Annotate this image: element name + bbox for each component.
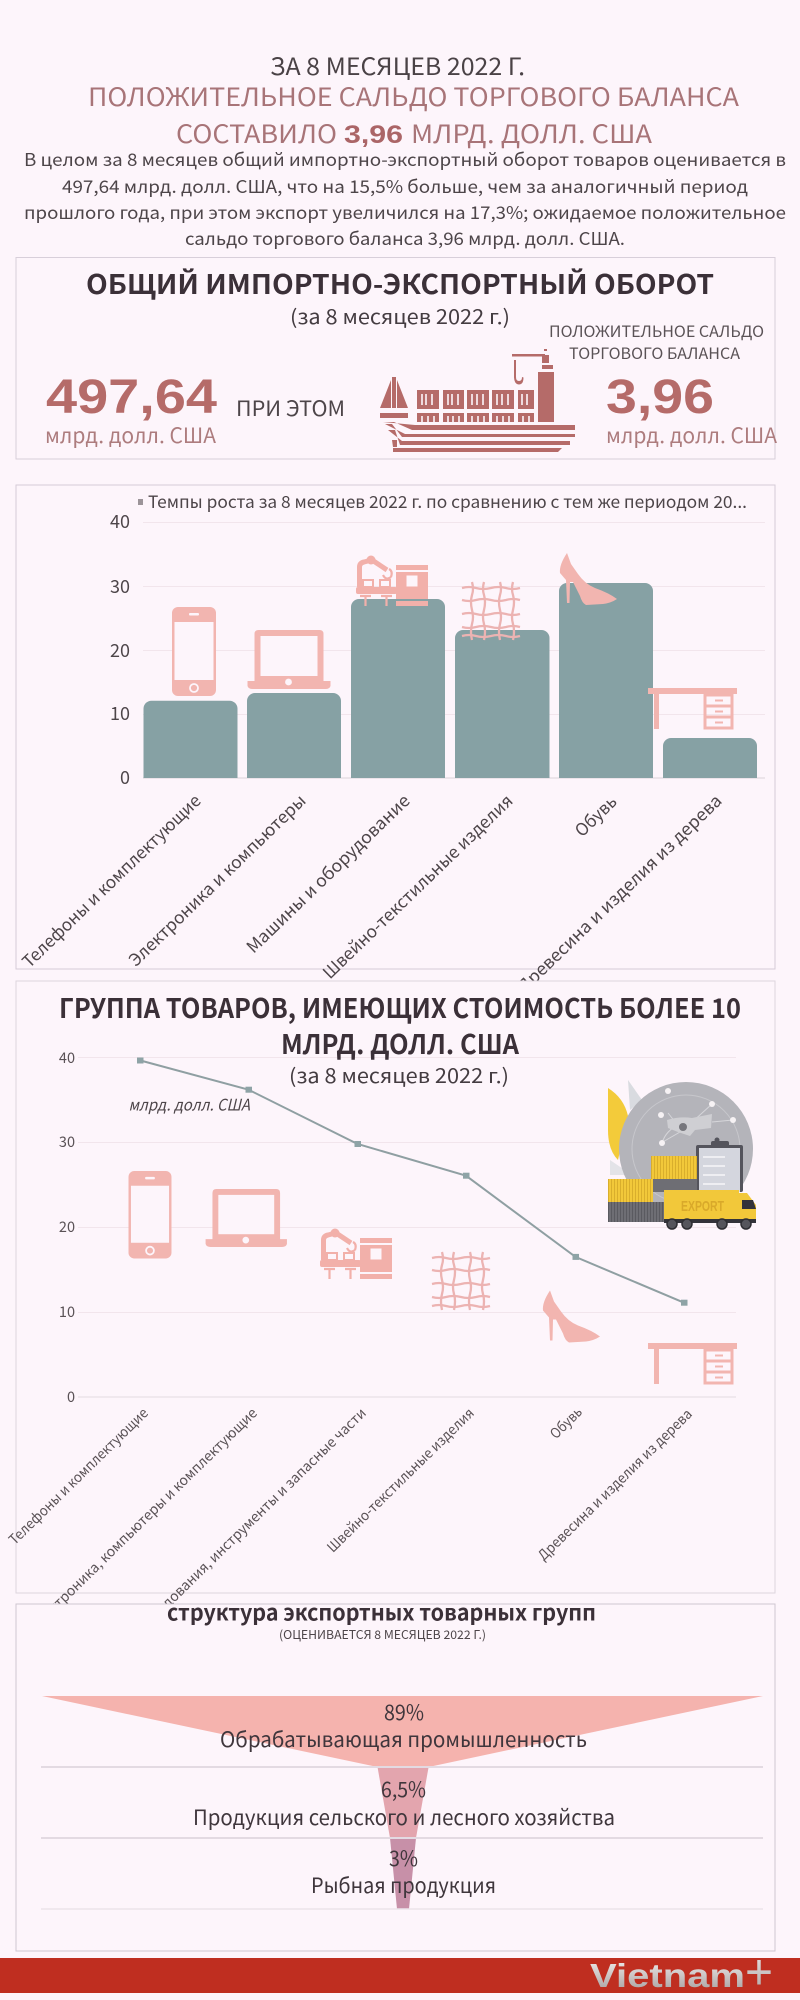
title line: period: ЗА 8 МЕСЯЦЕВ 2022 Г. bbox=[270, 47, 525, 82]
bar: textiles bbox=[455, 630, 550, 778]
heading: ОБЩИЙ ИМПОРТНО-ЭКСПОРТНЫЙ ОБОРОТ bbox=[86, 263, 714, 302]
icon: fabric bbox=[462, 582, 520, 640]
x axis labels: Обувь bbox=[545, 1402, 587, 1443]
x axis labels: Машины и оборудование bbox=[240, 788, 414, 958]
y axis: 40 bbox=[110, 508, 130, 534]
panel: goods over 10 billion line chart bbox=[4, 981, 775, 1687]
bars bbox=[144, 583, 757, 778]
x axis labels: Древесина и изделия из дерева bbox=[533, 1404, 696, 1565]
line series bbox=[137, 1058, 688, 1306]
y axis bbox=[110, 508, 130, 790]
y axis: 10 bbox=[110, 700, 130, 726]
figure: turnover bbox=[45, 371, 217, 450]
logo: Vietnam+ bbox=[590, 1944, 773, 2000]
icon: high heel bbox=[543, 1290, 600, 1342]
panel: total turnover bbox=[16, 258, 777, 459]
y axis: 10 bbox=[59, 1301, 75, 1322]
funnel tier: fishery bbox=[390, 1838, 416, 1909]
logo: Vietnam+: Vietnam bbox=[590, 1957, 745, 1994]
icon: desk bbox=[648, 688, 737, 729]
x axis labels: Машины, оборудования, инструменты и запасные части bbox=[81, 1403, 370, 1687]
icon: laptop bbox=[206, 1189, 287, 1247]
x axis labels: Электроника, компьютеры и комплектующие bbox=[26, 1403, 262, 1634]
x axis labels: Швейно-текстильные изделия bbox=[322, 1403, 478, 1557]
intro paragraph: В целом за 8 месяцев общий импортно-экспортный оборот товаров оценивается в bbox=[24, 147, 786, 172]
title line: amount bbox=[176, 115, 653, 151]
funnel labels: 3% bbox=[389, 1843, 418, 1873]
icon: high heel bbox=[560, 553, 617, 605]
panel: growth rate bar chart bbox=[15, 485, 775, 997]
figure: turnover: 497,64 bbox=[46, 371, 217, 424]
x axis labels: Телефоны и комплектующие bbox=[15, 788, 205, 972]
logo: Vietnam+: + bbox=[745, 1944, 773, 2000]
subheading: (за 8 месяцев 2022 г.) bbox=[289, 1060, 509, 1089]
icon: fabric bbox=[432, 1252, 490, 1310]
y axis bbox=[59, 1047, 75, 1407]
title line: amount: МЛРД. ДОЛЛ. США bbox=[411, 115, 653, 151]
figure: balance: млрд. долл. США bbox=[606, 420, 777, 450]
x axis labels bbox=[15, 788, 726, 997]
subheading: (за 8 месяцев 2022 г.) bbox=[290, 301, 510, 330]
y axis: 30 bbox=[59, 1131, 75, 1152]
icon: laptop bbox=[248, 630, 330, 689]
export illustration: EXPORT bbox=[681, 1198, 724, 1215]
y axis: 20 bbox=[110, 637, 130, 663]
title block bbox=[88, 47, 740, 151]
heading: ГРУППА ТОВАРОВ, ИМЕЮЩИХ СТОИМОСТЬ БОЛЕЕ 10 bbox=[59, 987, 741, 1026]
y axis: 40 bbox=[59, 1047, 75, 1068]
intro paragraph: сальдо торгового баланса 3,96 млрд. долл. США. bbox=[185, 226, 625, 251]
icon: phone bbox=[128, 1171, 171, 1258]
funnel labels: Обрабатывающая промышленность bbox=[220, 1724, 587, 1754]
y axis: 20 bbox=[59, 1216, 75, 1237]
footer band bbox=[0, 1944, 800, 2000]
intro paragraph: прошлого года, при этом экспорт увеличился на 17,3%; ожидаемое положительное bbox=[24, 200, 786, 225]
icon: robot machinery bbox=[320, 1228, 392, 1279]
x axis labels: Древесина и изделия из дерева bbox=[511, 788, 726, 997]
funnel labels bbox=[193, 1697, 615, 1900]
intro paragraph bbox=[24, 147, 786, 251]
figure: turnover: млрд. долл. США bbox=[45, 420, 216, 450]
connector text: ПРИ ЭТОМ bbox=[236, 393, 345, 423]
heading bbox=[59, 987, 741, 1062]
funnel labels: Рыбная продукция bbox=[311, 1870, 496, 1900]
title line: trade balance: ПОЛОЖИТЕЛЬНОЕ САЛЬДО ТОРГОВОГО БАЛАНСА bbox=[88, 78, 740, 114]
subheading: (ОЦЕНИВАЕТСЯ 8 МЕСЯЦЕВ 2022 Г.) bbox=[279, 1626, 486, 1643]
icon: desk bbox=[648, 1343, 737, 1384]
title line: amount: 3,96 bbox=[344, 121, 403, 149]
x axis labels: Швейно-текстильные изделия bbox=[316, 788, 517, 983]
x axis labels: Обувь bbox=[568, 789, 621, 841]
unit note: млрд. долл. США bbox=[128, 1092, 250, 1116]
bar: phones bbox=[144, 701, 238, 778]
label: positive balance: ПОЛОЖИТЕЛЬНОЕ САЛЬДО bbox=[549, 320, 764, 342]
icon: phone bbox=[172, 607, 216, 696]
icon: robot machinery bbox=[356, 556, 428, 606]
funnel tier: manufacturing bbox=[42, 1696, 763, 1767]
funnel labels: Продукция сельского и лесного хозяйства bbox=[193, 1802, 615, 1832]
label: positive balance: ТОРГОВОГО БАЛАНСА bbox=[569, 342, 741, 364]
y axis: 30 bbox=[110, 573, 130, 599]
x axis labels: Электроника и компьютеры bbox=[122, 788, 310, 971]
bar: electronics bbox=[247, 693, 341, 778]
funnel tier: agriculture bbox=[378, 1767, 429, 1838]
export illustration bbox=[608, 1080, 756, 1229]
figure: balance: 3,96 bbox=[606, 371, 714, 424]
funnel labels: 6,5% bbox=[381, 1774, 426, 1804]
intro paragraph: 497,64 млрд. долл. США, что на 15,5% больше, чем за аналогичный период bbox=[62, 174, 748, 199]
bar: wood bbox=[663, 738, 757, 778]
x axis labels bbox=[4, 1402, 696, 1687]
funnel bbox=[42, 1696, 763, 1909]
y axis: 0 bbox=[67, 1386, 75, 1407]
heading: МЛРД. ДОЛЛ. США bbox=[281, 1023, 520, 1062]
bar: footwear bbox=[559, 583, 653, 778]
bar: machinery bbox=[351, 599, 445, 778]
y axis: 0 bbox=[120, 764, 130, 790]
funnel labels: 89% bbox=[384, 1697, 424, 1727]
title line: amount: СОСТАВИЛО bbox=[176, 115, 337, 151]
icon: container ship bbox=[380, 349, 575, 452]
label: positive balance bbox=[549, 320, 764, 364]
figure: balance bbox=[606, 371, 777, 450]
x axis labels: Телефоны и комплектующие bbox=[4, 1403, 153, 1549]
heading: структура экспортных товарных групп bbox=[167, 1596, 596, 1628]
legend: Темпы роста за 8 месяцев 2022 г. по сравнению с тем же периодом 20... bbox=[148, 488, 747, 513]
panel: export structure funnel bbox=[16, 1596, 775, 1951]
